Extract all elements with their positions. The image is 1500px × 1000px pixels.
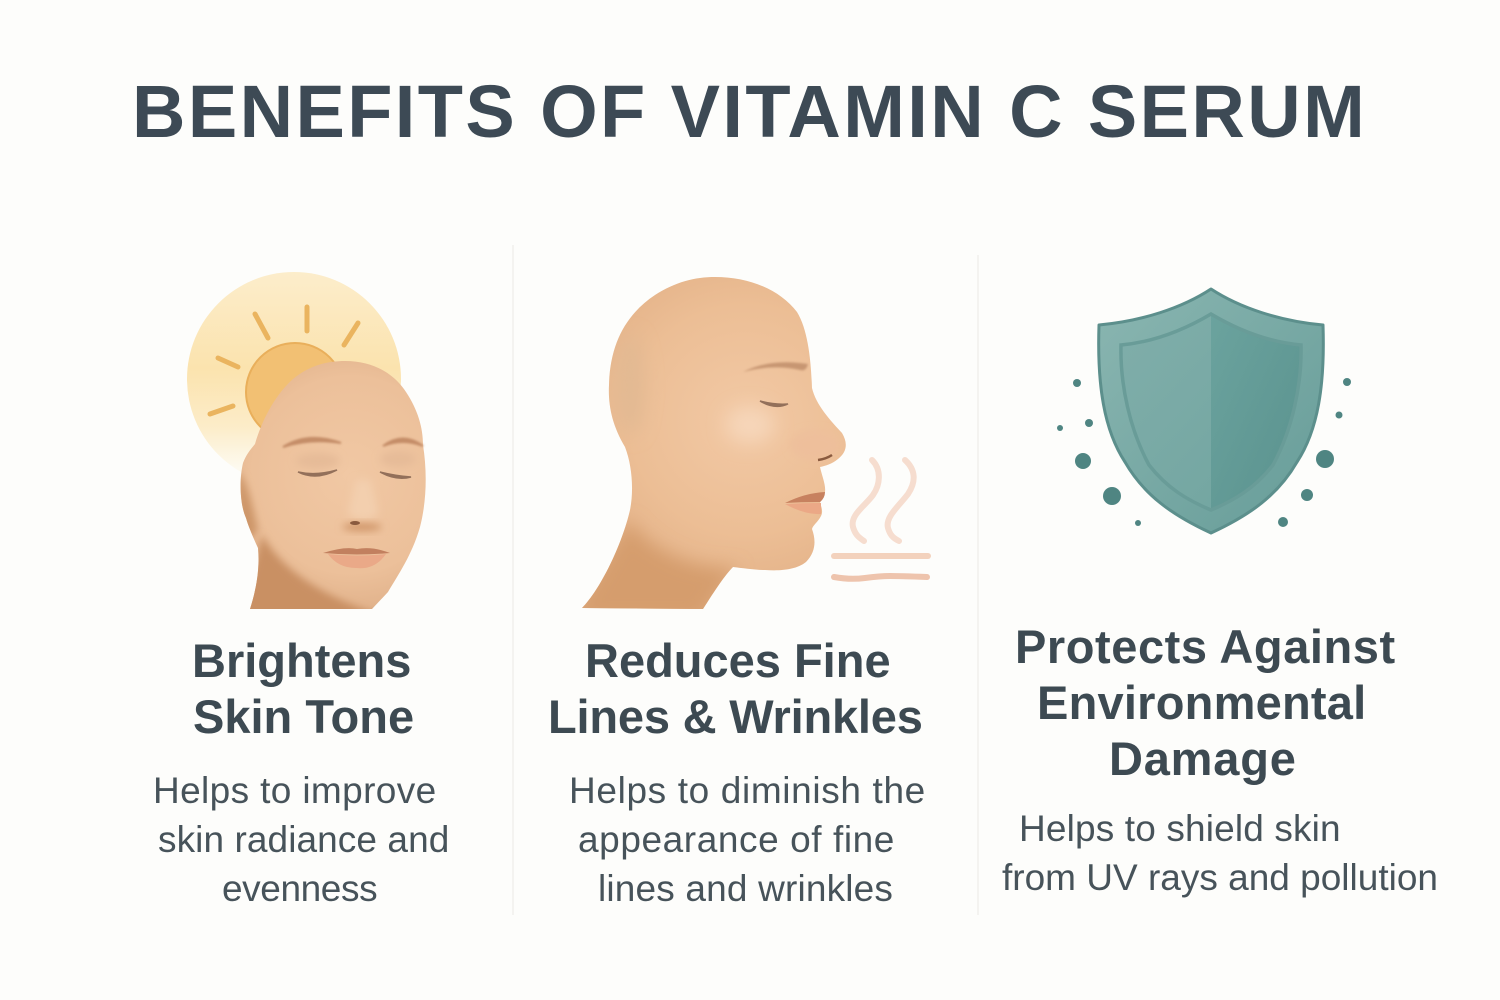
heading: protects: Damage [1109,732,1297,785]
heading: wrinkles [548,634,923,743]
heading: brightens [192,634,414,743]
text: protects description [1002,808,1438,898]
heading: wrinkles: Lines & Wrinkles [548,690,923,743]
heading: protects [1015,620,1396,785]
icon: sun behind face [187,272,401,486]
text: wrinkles description: appearance of fine [578,819,895,860]
text: brightens description: evenness [222,868,377,909]
icon: heat waves and lines [834,460,928,579]
text: protects description: from UV rays and pollution [1002,857,1438,898]
icon: shield [1099,289,1323,533]
heading: protects: Protects Against [1015,620,1396,673]
text: wrinkles description [569,770,926,909]
text: brightens description [153,770,449,909]
heading: brightens: Brightens [192,634,411,687]
icon: front-facing face [240,361,426,609]
heading: brightens: Skin Tone [193,690,414,743]
text: wrinkles description: lines and wrinkles [598,868,893,909]
text: brightens description: skin radiance and [158,819,449,860]
heading: protects: Environmental [1037,676,1366,729]
text: wrinkles description: Helps to diminish the [569,770,926,811]
column divider [512,245,514,915]
heading: wrinkles: Reduces Fine [585,634,891,687]
icon: shield particles [1057,378,1351,527]
text: brightens description: Helps to improve [153,770,437,811]
title: BENEFITS OF VITAMIN C SERUM [132,70,1367,153]
text: protects description: Helps to shield skin [1019,808,1341,849]
icon: profile face [582,277,846,609]
